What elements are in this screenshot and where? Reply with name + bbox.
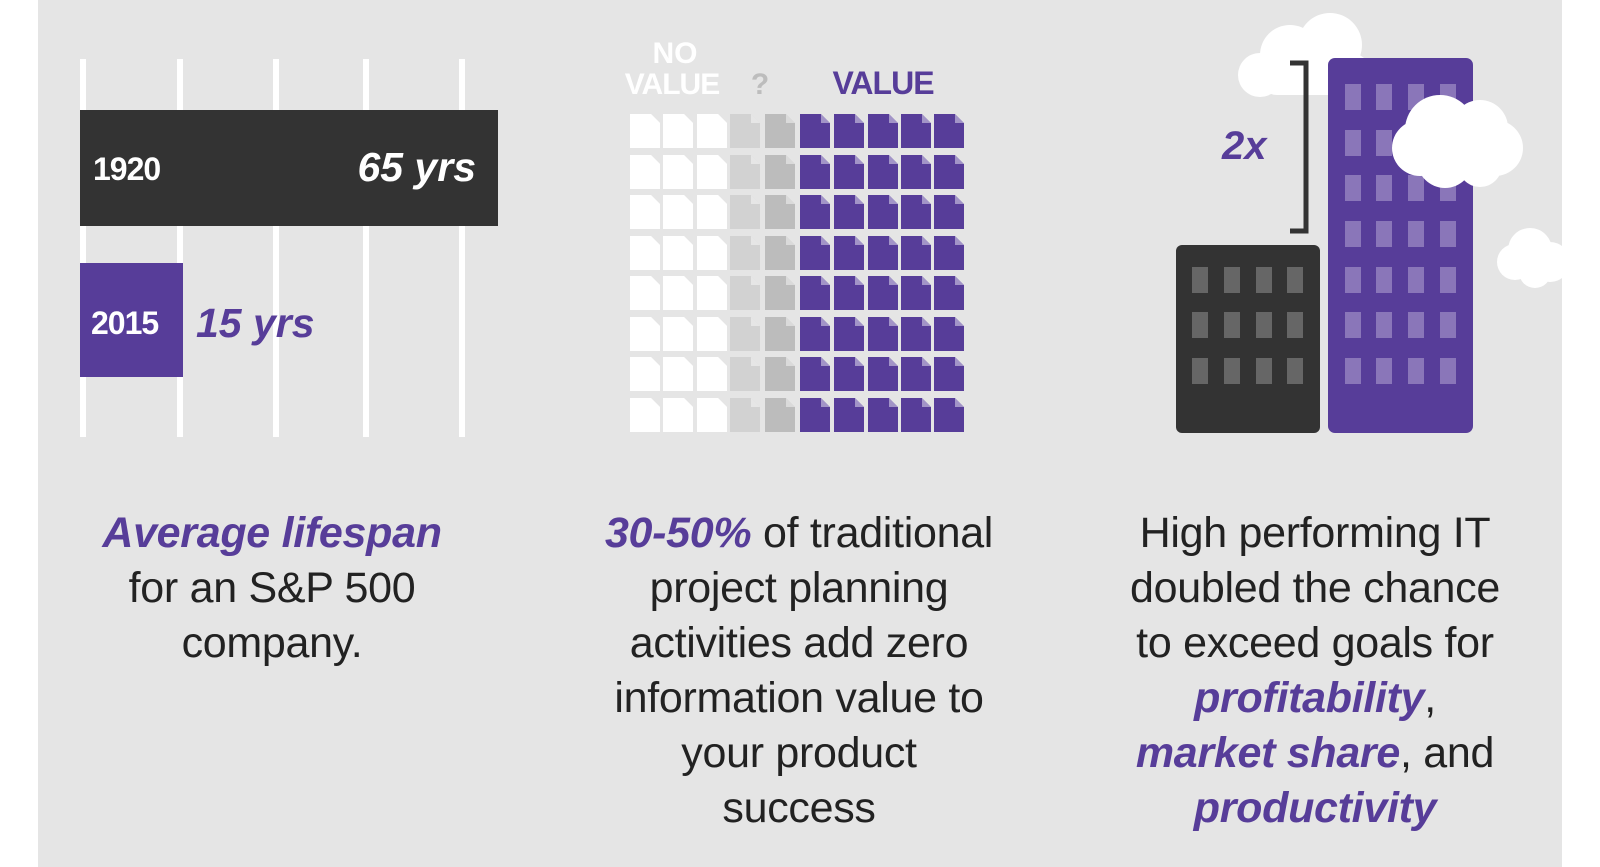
text: high performing IT xyxy=(1130,509,1500,832)
bar: 1920 xyxy=(80,110,498,226)
panel: document value grid xyxy=(625,37,964,432)
text: lifespan: company. xyxy=(182,619,362,667)
label: no value: VALUE xyxy=(625,68,719,101)
cloud: back xyxy=(1238,13,1372,97)
text: lifespan xyxy=(102,509,442,667)
text: high performing IT: doubled the chance xyxy=(1130,564,1500,612)
text: planning xyxy=(605,509,993,832)
text: planning: success xyxy=(722,784,876,832)
label: no value xyxy=(625,37,719,101)
bar: 2015: 15 yrs xyxy=(196,300,315,346)
bar: 2015: 2015 xyxy=(91,305,158,341)
text: high performing IT: productivity xyxy=(1194,784,1436,832)
cloud: right xyxy=(1497,228,1570,288)
text: planning: activities add zero xyxy=(630,619,968,667)
label: no value: NO xyxy=(652,37,698,70)
building: dark xyxy=(1176,245,1320,433)
label: 2x: 2x xyxy=(1221,124,1268,168)
text: high performing IT: market share, and xyxy=(1136,729,1494,777)
document icons xyxy=(630,114,964,432)
text: planning: information value to xyxy=(614,674,984,722)
text: high performing IT: to exceed goals for xyxy=(1136,619,1494,667)
text: lifespan: for an S&P 500 xyxy=(129,564,415,612)
text: planning: project planning xyxy=(650,564,948,612)
text: planning: your product xyxy=(681,729,917,777)
bar: 2015 xyxy=(80,263,315,377)
cloud: front xyxy=(1392,95,1523,188)
bracket xyxy=(1290,63,1306,231)
text: high performing IT: profitability, xyxy=(1194,674,1436,722)
label: value: VALUE xyxy=(832,65,934,101)
text: high performing IT: High performing IT xyxy=(1140,509,1490,557)
text: lifespan: Average lifespan xyxy=(102,509,442,557)
text: planning: 30-50% of traditional xyxy=(605,509,993,557)
panel: buildings xyxy=(1176,13,1562,433)
bar: 1920: 1920 xyxy=(93,151,160,187)
bar: 1920: 65 yrs xyxy=(357,144,476,190)
building: purple xyxy=(1328,58,1473,433)
label: question mark: ? xyxy=(751,68,769,101)
panel: lifespan bar chart xyxy=(80,59,498,437)
